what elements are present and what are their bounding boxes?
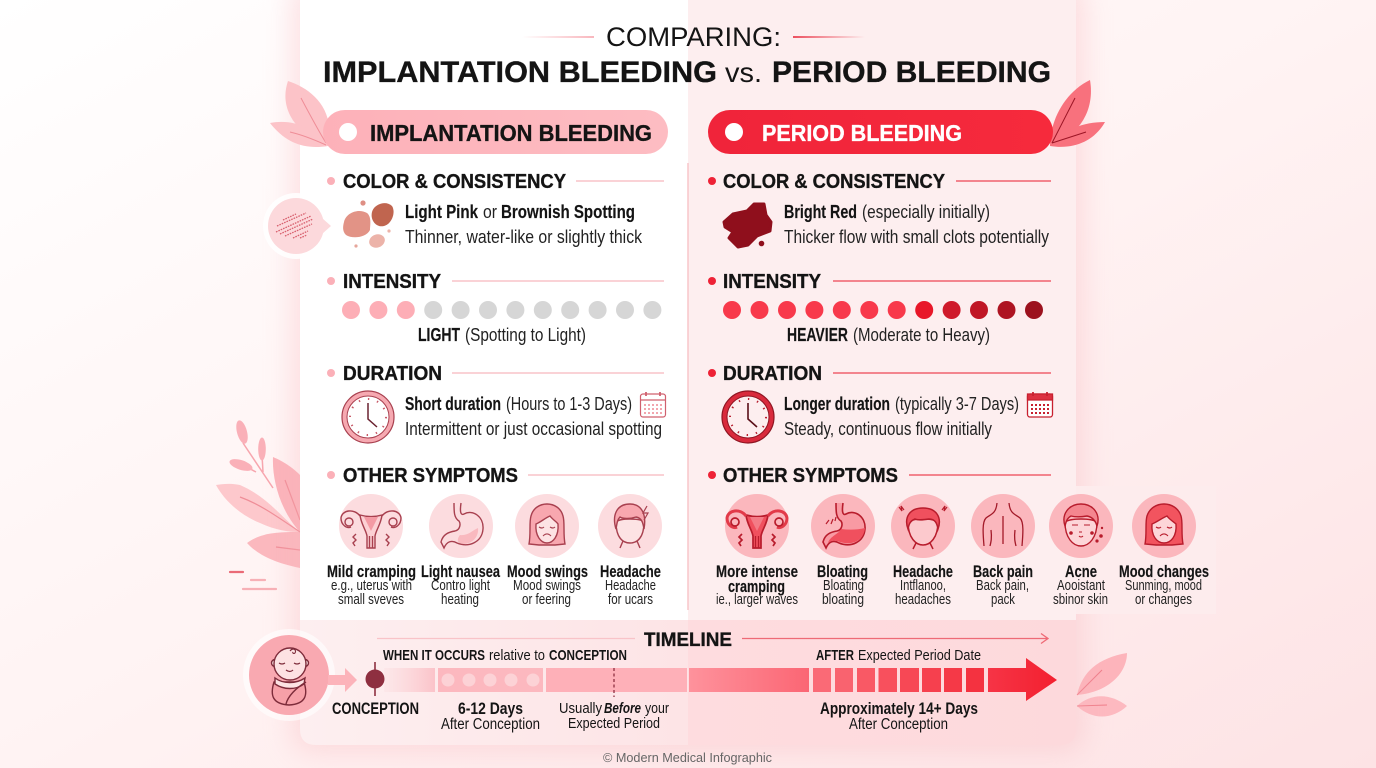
heading: other symptoms: OTHER SYMPTOMS — [723, 465, 898, 487]
icon: clock — [722, 391, 774, 443]
heading: intensity — [708, 271, 1051, 293]
timeline heading: TIMELINE — [644, 630, 732, 651]
symptom: back pain: Back pain, — [976, 578, 1029, 594]
text: color description: or — [483, 202, 497, 222]
label: before expected period: Usually — [559, 700, 602, 717]
heading: color and consistency: COLOR & CONSISTENCY — [723, 171, 946, 193]
symptom: acne — [1049, 494, 1113, 608]
intensity dots: light — [342, 301, 661, 319]
symptom: mood changes — [1119, 494, 1209, 608]
footer credit: © Modern Medical Infographic — [603, 751, 772, 765]
heading: other symptoms — [327, 465, 664, 487]
heading: other symptoms: OTHER SYMPTOMS — [343, 465, 518, 487]
text: heavier intensity — [787, 325, 990, 345]
text: color description: Thinner, water-like or slightly thick — [405, 227, 643, 247]
text: color description: Brownish Spotting — [501, 202, 635, 222]
symptom: acne: Aooistant — [1057, 578, 1105, 594]
symptom: bloating — [811, 494, 875, 608]
heading: duration: DURATION — [343, 363, 442, 385]
icon: clock — [342, 391, 394, 443]
symptom: headache — [598, 494, 662, 608]
label: approximately 14+ days: Approximately 14+ Days — [820, 700, 978, 718]
text: when it occurs: CONCEPTION — [549, 647, 627, 664]
text: after expected period date: Expected Period Date — [858, 647, 981, 664]
symptom: mild cramping — [327, 494, 416, 608]
icon: bright red blob — [724, 204, 771, 247]
pill heading: period bleeding: PERIOD BLEEDING — [762, 120, 962, 146]
symptom: back pain — [971, 494, 1035, 608]
symptom: light nausea — [421, 494, 501, 608]
label: 6-12 days: After Conception — [441, 716, 540, 733]
decorative leaves: lower left — [216, 419, 300, 568]
symptom: headache: Intflanoo, — [900, 578, 946, 594]
timeline panel background — [300, 620, 1076, 745]
symptom: mood swings: or feering — [522, 592, 571, 608]
symptom: headache: Headache — [600, 563, 661, 581]
symptom: mild cramping: e.g., uterus with — [331, 578, 412, 594]
symptom: back pain: pack — [991, 592, 1016, 608]
marker: conception — [366, 662, 384, 696]
symptom: light nausea: Contro light — [431, 578, 490, 594]
panel: timeline — [243, 629, 1057, 733]
panel: period background — [688, 0, 1076, 625]
icon: calendar — [640, 392, 666, 417]
timeline heading — [377, 630, 1048, 651]
title: IMPLANTATION BLEEDING — [323, 56, 717, 89]
title — [323, 22, 1051, 89]
label: conception: CONCEPTION — [332, 700, 419, 718]
symptom: headache: Headache — [893, 563, 953, 581]
text: short duration: Intermittent or just occasional spotting — [405, 419, 662, 439]
symptom: back pain: Back pain — [973, 563, 1033, 581]
symptom: headache: headaches — [895, 592, 951, 608]
label: 6-12 days — [441, 700, 540, 733]
text: heavier intensity: HEAVIER — [787, 325, 848, 345]
symptom: headache: for ucars — [608, 592, 653, 608]
text: longer duration: Steady, continuous flow initially — [784, 419, 992, 439]
icon: calendar — [1028, 392, 1052, 417]
label: approximately 14+ days — [820, 700, 978, 733]
panel: period details — [708, 171, 1209, 608]
leaves behind period pill — [1050, 80, 1105, 147]
icon: swaddled baby — [243, 629, 335, 721]
text: color description: Bright Red — [784, 202, 857, 222]
symptom: mood changes: or changes — [1135, 592, 1192, 608]
symptom: light nausea: Light nausea — [421, 563, 501, 581]
symptom: mild cramping: Mild cramping — [327, 563, 416, 581]
heading: color and consistency: COLOR & CONSISTENCY — [343, 171, 567, 193]
symptom: acne: Acne — [1065, 563, 1097, 581]
symptom: headache: Headache — [605, 578, 656, 594]
symptom: mood swings: Mood swings — [513, 578, 581, 594]
decorative leaves: lower right — [1077, 653, 1127, 716]
heading: intensity: INTENSITY — [343, 271, 442, 293]
panel: implantation details — [263, 171, 666, 608]
symptom: mood swings — [507, 494, 588, 608]
decorative dashes — [230, 572, 276, 589]
text: color description: Thicker flow with small clots potentially — [784, 227, 1049, 247]
text: color description: (especially initially) — [862, 202, 990, 222]
text: light intensity — [418, 325, 586, 345]
title: vs. — [725, 57, 762, 88]
text: light intensity: (Spotting to Light) — [465, 325, 586, 345]
label: 6-12 days: 6-12 Days — [458, 700, 523, 718]
label: before expected period: Expected Period — [568, 715, 660, 732]
label: approximately 14+ days: After Conception — [849, 716, 948, 733]
panel: implantation background — [300, 0, 688, 625]
heading: duration: DURATION — [723, 363, 822, 385]
symptom: bloating: bloating — [822, 592, 864, 608]
text: color description — [784, 202, 1049, 247]
pill heading: implantation bleeding — [323, 110, 668, 154]
icon: speech bubble with cell texture — [263, 193, 331, 259]
timeline bar — [384, 668, 984, 692]
title: COMPARING: — [606, 22, 781, 52]
heading: intensity: INTENSITY — [723, 271, 822, 293]
pill heading: implantation bleeding: IMPLANTATION BLEEDING — [370, 120, 652, 146]
symptom: more intense cramping — [716, 494, 798, 608]
text: short duration: Short duration — [405, 394, 501, 414]
symptom: mood changes: Sunming, mood — [1125, 578, 1202, 594]
text: when it occurs — [383, 647, 627, 664]
text: longer duration: (typically 3-7 Days) — [895, 394, 1019, 414]
icon: light pink and brown spots — [343, 200, 394, 250]
intensity dots: heavier — [723, 301, 1043, 319]
symptom: mood swings: Mood swings — [507, 563, 588, 581]
heading: duration — [327, 363, 664, 385]
label: before expected period — [559, 700, 669, 732]
overflow strip behind right symptoms — [1076, 486, 1216, 614]
symptom: headache — [891, 494, 955, 608]
text: longer duration: Longer duration — [784, 394, 890, 414]
leaves behind implantation pill — [270, 81, 329, 147]
text: when it occurs: WHEN IT OCCURS — [383, 647, 485, 664]
symptom: bloating: Bloating — [817, 563, 868, 581]
symptom: acne: sbinor skin — [1053, 592, 1108, 608]
text: short duration: (Hours to 1-3 Days) — [506, 394, 632, 414]
heading: other symptoms — [708, 465, 1051, 487]
text: color description: Light Pink — [405, 202, 479, 222]
arrow: baby to conception — [328, 668, 357, 692]
symptom: more intense cramping: More intense — [716, 563, 798, 581]
text: after expected period date — [816, 647, 981, 664]
symptom: more intense cramping: ie., larger waves — [716, 592, 798, 608]
symptom: mood changes: Mood changes — [1119, 563, 1209, 581]
text: when it occurs: relative to — [489, 647, 545, 664]
title: PERIOD BLEEDING — [772, 56, 1051, 89]
symptom: more intense cramping: cramping — [728, 578, 785, 596]
heading: duration — [708, 363, 1051, 385]
text: light intensity: LIGHT — [418, 325, 460, 345]
symptom: mild cramping: small sveves — [338, 592, 404, 608]
heading: intensity — [327, 271, 664, 293]
text: color description — [405, 202, 643, 247]
label: before expected period: Before — [604, 700, 641, 717]
symptom: light nausea: heating — [441, 592, 479, 608]
marker: expected period dashed line — [613, 668, 615, 697]
arrow: timeline head — [988, 658, 1057, 701]
text: short duration — [405, 394, 662, 439]
text: heavier intensity: (Moderate to Heavy) — [853, 325, 990, 345]
text: after expected period date: AFTER — [816, 647, 854, 664]
panel shadow — [292, 0, 1084, 752]
symptom: bloating: Bloating — [823, 578, 864, 594]
pill heading: period bleeding — [708, 110, 1053, 154]
centre divider — [687, 163, 689, 610]
label: before expected period: your — [645, 700, 669, 717]
text: longer duration — [784, 394, 1019, 439]
